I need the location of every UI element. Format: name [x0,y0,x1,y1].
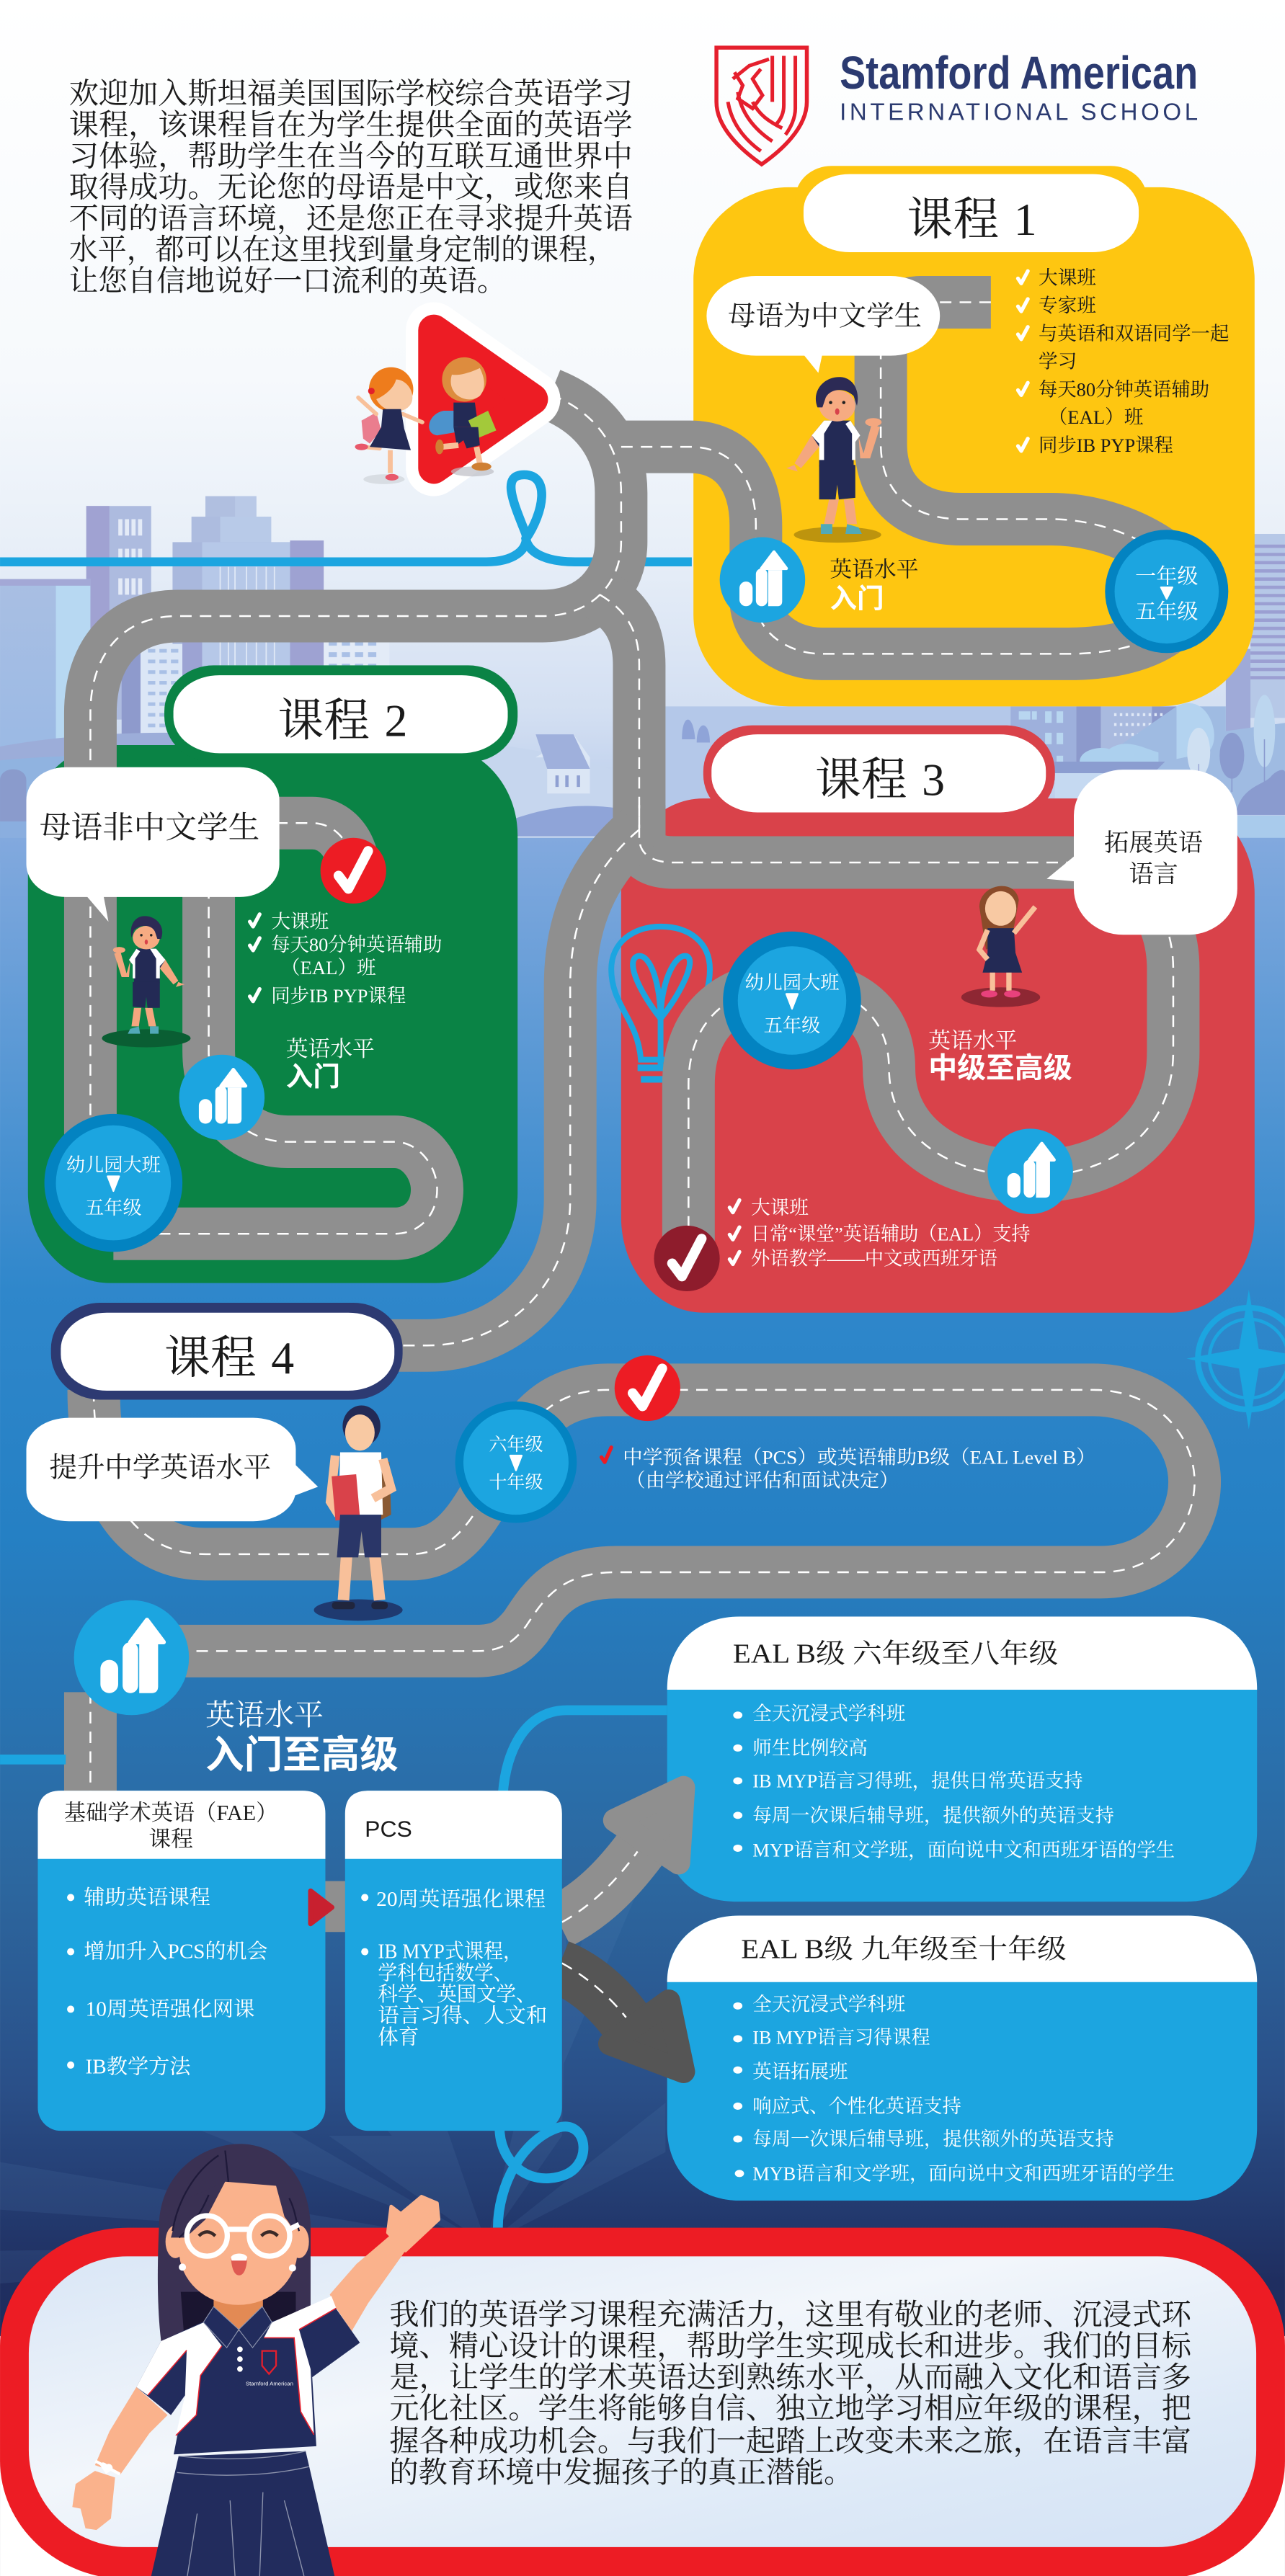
decorative blue river line [0,475,692,562]
icon: red check course 4 [615,1355,680,1421]
background sea gradient [0,838,1285,2576]
card: EAL B grades 9-10: 每周一次课后辅导班，提供额外的英语支持 [752,2129,1114,2150]
level label course 2: 入门 [286,1061,340,1092]
intro text block [69,77,633,298]
panel 3 heading pill: 课程 [815,754,907,806]
panel 2 bullet list: 每天80分钟英语辅助 [271,934,442,955]
illustration: boy running [429,357,497,476]
speech bubble: native Chinese [706,276,940,373]
panel 1 bullet list: 大课班 [1039,267,1096,288]
icon: dark red check [654,1226,720,1291]
intro text block: 水平，都可以在这里找到量身定制的课程， [69,233,616,266]
grade badge course 4 [455,1401,577,1523]
level label course 2 [286,1037,375,1092]
icon: level arrow course 2 [179,1055,264,1140]
card: PCS course: 20周英语强化课程 [376,1888,546,1911]
panel 2 bullet list [250,911,442,1007]
closing text block: 我们的英语学习课程充满活力，这里有敬业的老师、沉浸式环 [389,2298,1193,2331]
level label course 4 [205,1698,399,1776]
speech bubble: secondary English [27,1418,318,1521]
panel 1 bullet list: 与英语和双语同学一起 [1039,323,1229,344]
grade badge course 2: 幼儿园大班 [66,1155,161,1176]
panel 2 heading pill: 2 [385,695,407,746]
connector: left thin line [0,1755,66,1765]
panel 3 bullet list: 大课班 [751,1197,809,1218]
panel 1 bullet list [1018,267,1229,456]
card: FAE course: 增加升入PCS的机会 [84,1940,268,1964]
icon: red check course 2 [321,838,386,904]
panel 3 heading pill: 3 [922,754,945,806]
white lower page corners [0,2336,1285,2576]
card: EAL B grades 6-8: 师生比例较高 [752,1737,868,1759]
closing text block: 元化社区。学生将能够自信、独立地学习相应年级的课程，把 [389,2392,1191,2425]
connector: grey road between cards [322,1881,348,1932]
panel 3 heading pill [703,726,1055,821]
card: FAE course [37,1791,325,2131]
card: EAL B grades 6-8: MYP语言和文学班，面向说中文和西班牙语的学生 [752,1839,1175,1860]
closing text block: 握各种成功机会。与我们一起踏上改变未来之旅，在语言丰富 [389,2425,1191,2458]
level label course 4: 英语水平 [205,1698,324,1732]
level label course 3: 英语水平 [928,1029,1017,1053]
start marker: red triangle [434,330,533,468]
card: FAE course: 基础学术英语（FAE） [64,1801,277,1825]
card: FAE course: IB教学方法 [86,2055,191,2078]
icon: compass [1186,1290,1285,1430]
panel 2 heading pill: 课程 [277,695,370,746]
level label course 3: 中级至高级 [928,1053,1072,1084]
closing text block [389,2298,1193,2489]
arrow: grey up to EAL B grades 6-8 [559,1788,683,1922]
panel 1 heading pill: 1 [1014,194,1037,245]
card: PCS course: 体育 [378,2025,419,2049]
card: EAL B grades 9-10: EAL B级 九年级至十年级 [741,1935,1067,1965]
grade badge course 3: 幼儿园大班 [744,973,839,994]
panel 2 bullet list: 大课班 [271,911,329,932]
icon: house [535,734,590,793]
intro text block: 习体验，帮助学生在当今的互联互通世界中 [69,139,633,172]
panel 1 bullet list: 专家班 [1039,295,1096,316]
card: PCS course: PCS [365,1816,412,1842]
card: EAL B grades 9-10: MYB语言和文学班，面向说中文和西班牙语的学生 [752,2163,1175,2185]
panel 1 bullet list: （EAL）班 [1049,406,1144,428]
connector: thin blue lines [498,1710,667,2228]
panel: course 2 background [28,745,517,1283]
card: FAE course: 辅助英语课程 [84,1886,210,1909]
card: EAL B grades 9-10: IB MYP语言习得课程 [752,2026,930,2048]
panel 3 bullet list: 外语教学——中文或西班牙语 [751,1248,997,1270]
panel 4 note: 中学预备课程（PCS）或英语辅助B级（EAL Level B） [623,1446,1096,1468]
level label course 1: 英语水平 [830,557,918,581]
panel 4 note [602,1446,1096,1491]
card: EAL B grades 9-10: 英语拓展班 [752,2061,848,2082]
card: EAL B grades 9-10: 全天沉浸式学科班 [752,1994,906,2015]
level label course 4: 入门至高级 [205,1734,399,1776]
background city skyline [0,496,1285,904]
illustration: girl running [355,367,422,484]
icon: level arrow course 1 [720,538,805,623]
level label course 2: 英语水平 [286,1037,375,1061]
card: EAL B grades 9-10: 响应式、个性化英语支持 [752,2095,961,2117]
panel 3 bullet list [729,1197,1031,1270]
illustration: teacher: Stamford American [246,2381,293,2387]
level label course 1 [830,557,918,614]
grade badge course 4: 十年级 [489,1473,543,1493]
panel 2 heading pill [164,665,517,762]
level label course 3 [928,1029,1072,1084]
panel: closing message [0,2228,1285,2576]
arrow: dark down to EAL B grades 9-10 [559,1964,683,2072]
panel 2 bullet list: 同步IB PYP课程 [271,985,406,1007]
road network [90,303,1195,1799]
panel 3 bullet list: 日常“课堂”英语辅助（EAL）支持 [751,1223,1031,1244]
icon: light bulb [611,927,710,1079]
logo: INTERNATIONAL SCHOOL [840,99,1198,125]
intro text block: 不同的语言环境，还是您正在寻求提升英语 [69,202,633,235]
intro text block: 取得成功。无论您的母语是中文，或您来自 [69,171,633,204]
card: EAL B grades 6-8: 每周一次课后辅导班，提供额外的英语支持 [752,1804,1114,1826]
illustration: boy course 2 [102,916,191,1047]
grade badge course 4: 六年级 [489,1435,543,1455]
icon: level arrow course 4 [74,1600,189,1715]
card: EAL B grades 6-8: EAL B级 六年级至八年级 [733,1639,1058,1669]
speech bubble: non-native Chinese [27,767,280,922]
card: PCS course [345,1791,562,2131]
panel 4 heading pill [51,1303,403,1400]
grade badge course 1: 五年级 [1135,600,1199,623]
closing text block: 的教育环境中发掘孩子的真正潜能。 [389,2456,853,2489]
speech bubble: extend English: 拓展英语 [1104,829,1203,857]
illustration: girl course 3 [961,886,1040,1007]
card: PCS course: 科学、英国文学、 [378,1983,535,2006]
panel 1 heading pill [804,174,1139,252]
card: EAL B grades 6-8: IB MYP语言习得班，提供日常英语支持 [752,1770,1083,1792]
background sun rays [0,1807,674,2283]
closing text block: 境、精心设计的课程，帮助学生实现成长和进步。我们的目标 [389,2329,1193,2362]
panel 4 heading pill: 课程 [164,1332,257,1383]
panel: course 1 background [693,166,1255,706]
background sky [0,0,1285,838]
intro text block: 课程，该课程旨在为学生提供全面的英语学 [69,108,633,141]
card: EAL B grades 6-8: 全天沉浸式学科班 [752,1703,906,1724]
panel 4 heading pill: 4 [271,1332,294,1383]
grade badge course 1: 一年级 [1135,564,1199,588]
speech bubble: secondary English: 提升中学英语水平 [49,1453,271,1484]
level label course 1: 入门 [830,584,884,614]
grade badge course 2 [45,1114,182,1252]
logo: Stamford American [840,47,1198,99]
panel 2 bullet list: （EAL）班 [281,957,376,979]
card: FAE course: 课程 [148,1827,193,1852]
illustration: older boy [314,1406,403,1621]
icon: level arrow course 3 [987,1128,1073,1214]
grade badge course 3 [723,932,861,1069]
card: FAE course: 10周英语强化网课 [86,1998,254,2021]
icon: red marker between cards [311,1891,332,1924]
speech bubble: native Chinese: 母语为中文学生 [728,300,922,331]
speech bubble: extend English: 语言 [1129,860,1178,888]
card: EAL B grades 6-8 [667,1616,1257,1902]
panel 1 heading pill: 课程 [907,194,999,245]
grade badge course 2: 五年级 [85,1198,142,1218]
speech bubble: extend English [1046,770,1237,935]
card: PCS course: IB MYP式课程， [378,1940,523,1964]
panel 1 bullet list: 学习 [1039,351,1077,373]
panel: course 3 background [621,798,1255,1313]
closing text block: 是，让学生的学术英语达到熟练水平，从而融入文化和语言多 [389,2361,1191,2394]
illustration: teacher [72,2144,439,2576]
speech bubble: non-native Chinese: 母语非中文学生 [40,811,259,845]
illustration: boy course 1 [786,377,881,543]
logo [716,47,1198,164]
card: PCS course: 学科包括数学、 [378,1961,512,1984]
card: EAL B grades 9-10 [667,1915,1257,2201]
card: PCS course: 语言习得、人文和 [378,2005,547,2028]
panel 1 bullet list: 每天80分钟英语辅助 [1039,378,1209,400]
panel 1 bullet list: 同步IB PYP课程 [1039,434,1173,456]
icon: shield [716,48,806,164]
grade badge course 3: 五年级 [764,1015,820,1036]
intro text block: 让您自信地说好一口流利的英语。 [69,264,506,298]
grade badge course 1 [1105,530,1228,653]
intro text block: 欢迎加入斯坦福美国国际学校综合英语学习 [69,77,633,110]
panel 4 note: （由学校通过评估和面试决定） [626,1469,899,1491]
